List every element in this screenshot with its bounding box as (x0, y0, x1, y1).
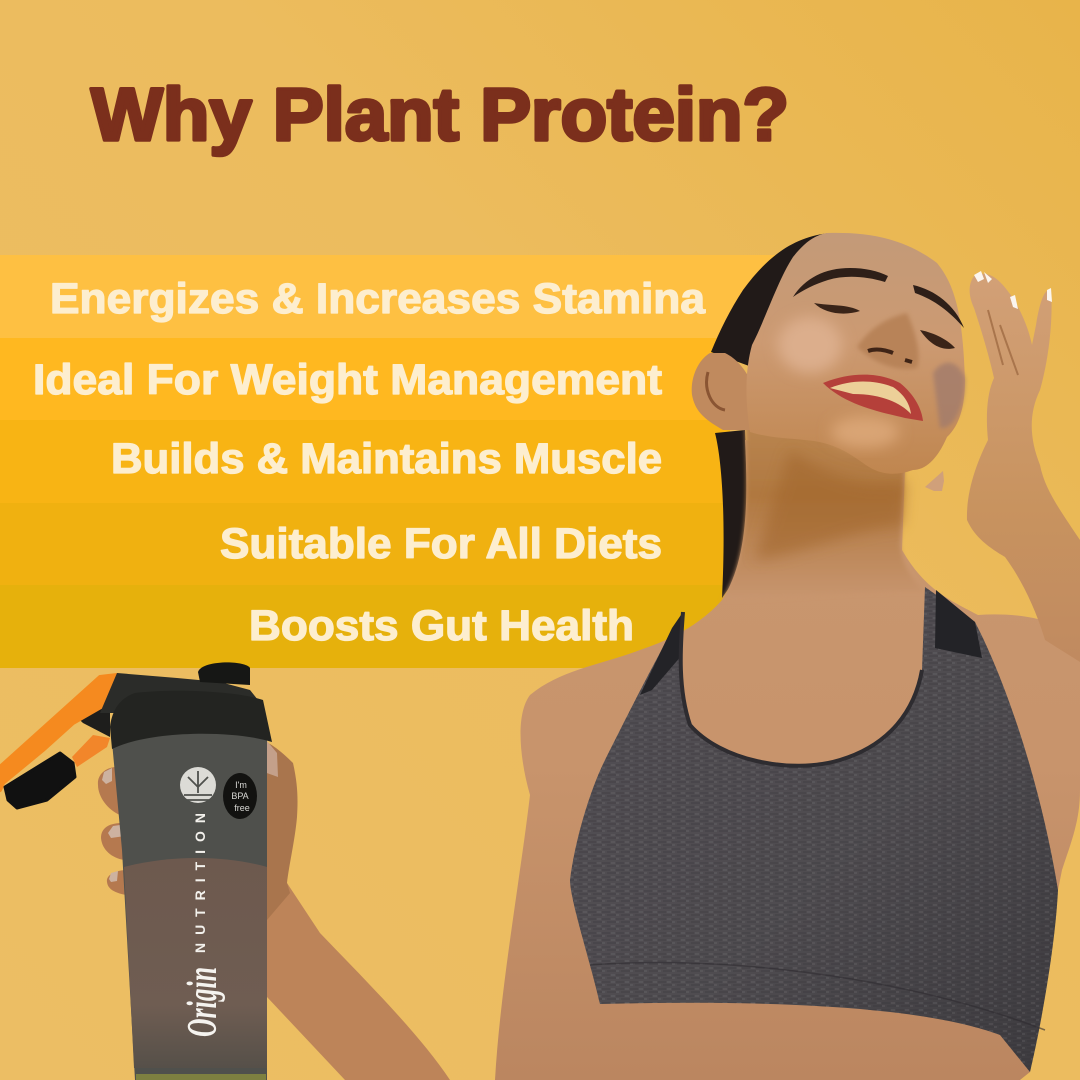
thumbnail (256, 738, 278, 777)
orange strap (0, 675, 123, 790)
bottom residue (136, 1074, 266, 1080)
fingers (98, 767, 128, 895)
band: muscle: Builds & Maintains Muscle (111, 435, 662, 483)
nose (857, 313, 919, 369)
raised forearm and hand (967, 274, 1080, 662)
cheek highlight (778, 317, 842, 373)
lid arm (100, 673, 262, 713)
fingernails (974, 271, 1052, 309)
face (746, 233, 965, 474)
neck (722, 425, 925, 600)
logo tree (180, 767, 216, 803)
finger separation lines (988, 310, 1018, 375)
band: gut health (0, 585, 730, 668)
band: gut health: Boosts Gut Health (249, 602, 634, 650)
ear (692, 353, 765, 430)
eye left (814, 303, 860, 314)
brand: nutrition: NUTRITION (192, 813, 208, 953)
spout cap (198, 662, 250, 685)
eye right (920, 330, 955, 349)
sticker (223, 773, 257, 819)
chin tip (925, 471, 944, 491)
fingernails (102, 768, 127, 882)
brand: origin: Origin (180, 967, 226, 1037)
palm and thumb (255, 740, 298, 920)
woman (495, 233, 1080, 1080)
sports bra (570, 587, 1058, 1072)
bra texture (570, 587, 1058, 1072)
nostrils (868, 350, 912, 362)
band: energizes: Energizes & Increases Stamina (50, 275, 706, 323)
forearm (267, 880, 450, 1080)
lid ring (110, 691, 272, 749)
teeth (830, 382, 911, 414)
band: diets: Suitable For All Diets (220, 520, 662, 568)
shaker bottle (0, 662, 272, 1080)
shake liquid (124, 858, 267, 1068)
hinge (67, 697, 110, 737)
title: Why Plant Protein? (91, 73, 789, 156)
panel: benefit bands (0, 255, 778, 668)
band: weight management: Ideal For Weight Management (33, 356, 662, 404)
chin highlight (831, 416, 899, 448)
bra bottom band (590, 963, 1045, 1030)
sticker text: free (234, 803, 250, 813)
orange strap lower (72, 735, 110, 767)
neck shadow (755, 450, 906, 560)
eyebrow right (913, 285, 964, 328)
neckline binding (681, 612, 922, 766)
band: energizes (0, 255, 778, 338)
flip cap (5, 753, 75, 808)
cup body (112, 730, 267, 1080)
torso and arms (495, 440, 1080, 1080)
cheek shadow (933, 363, 965, 428)
eyebrow left (793, 268, 888, 297)
hair (711, 233, 830, 598)
sticker text: I'm (235, 780, 247, 790)
band: diets (0, 503, 730, 585)
mouth (823, 375, 923, 421)
band: weight management (0, 338, 730, 420)
hand behind bottle (98, 738, 450, 1080)
black strap panels (640, 590, 982, 695)
band: muscle (0, 420, 730, 503)
sticker text: BPA (231, 791, 249, 801)
